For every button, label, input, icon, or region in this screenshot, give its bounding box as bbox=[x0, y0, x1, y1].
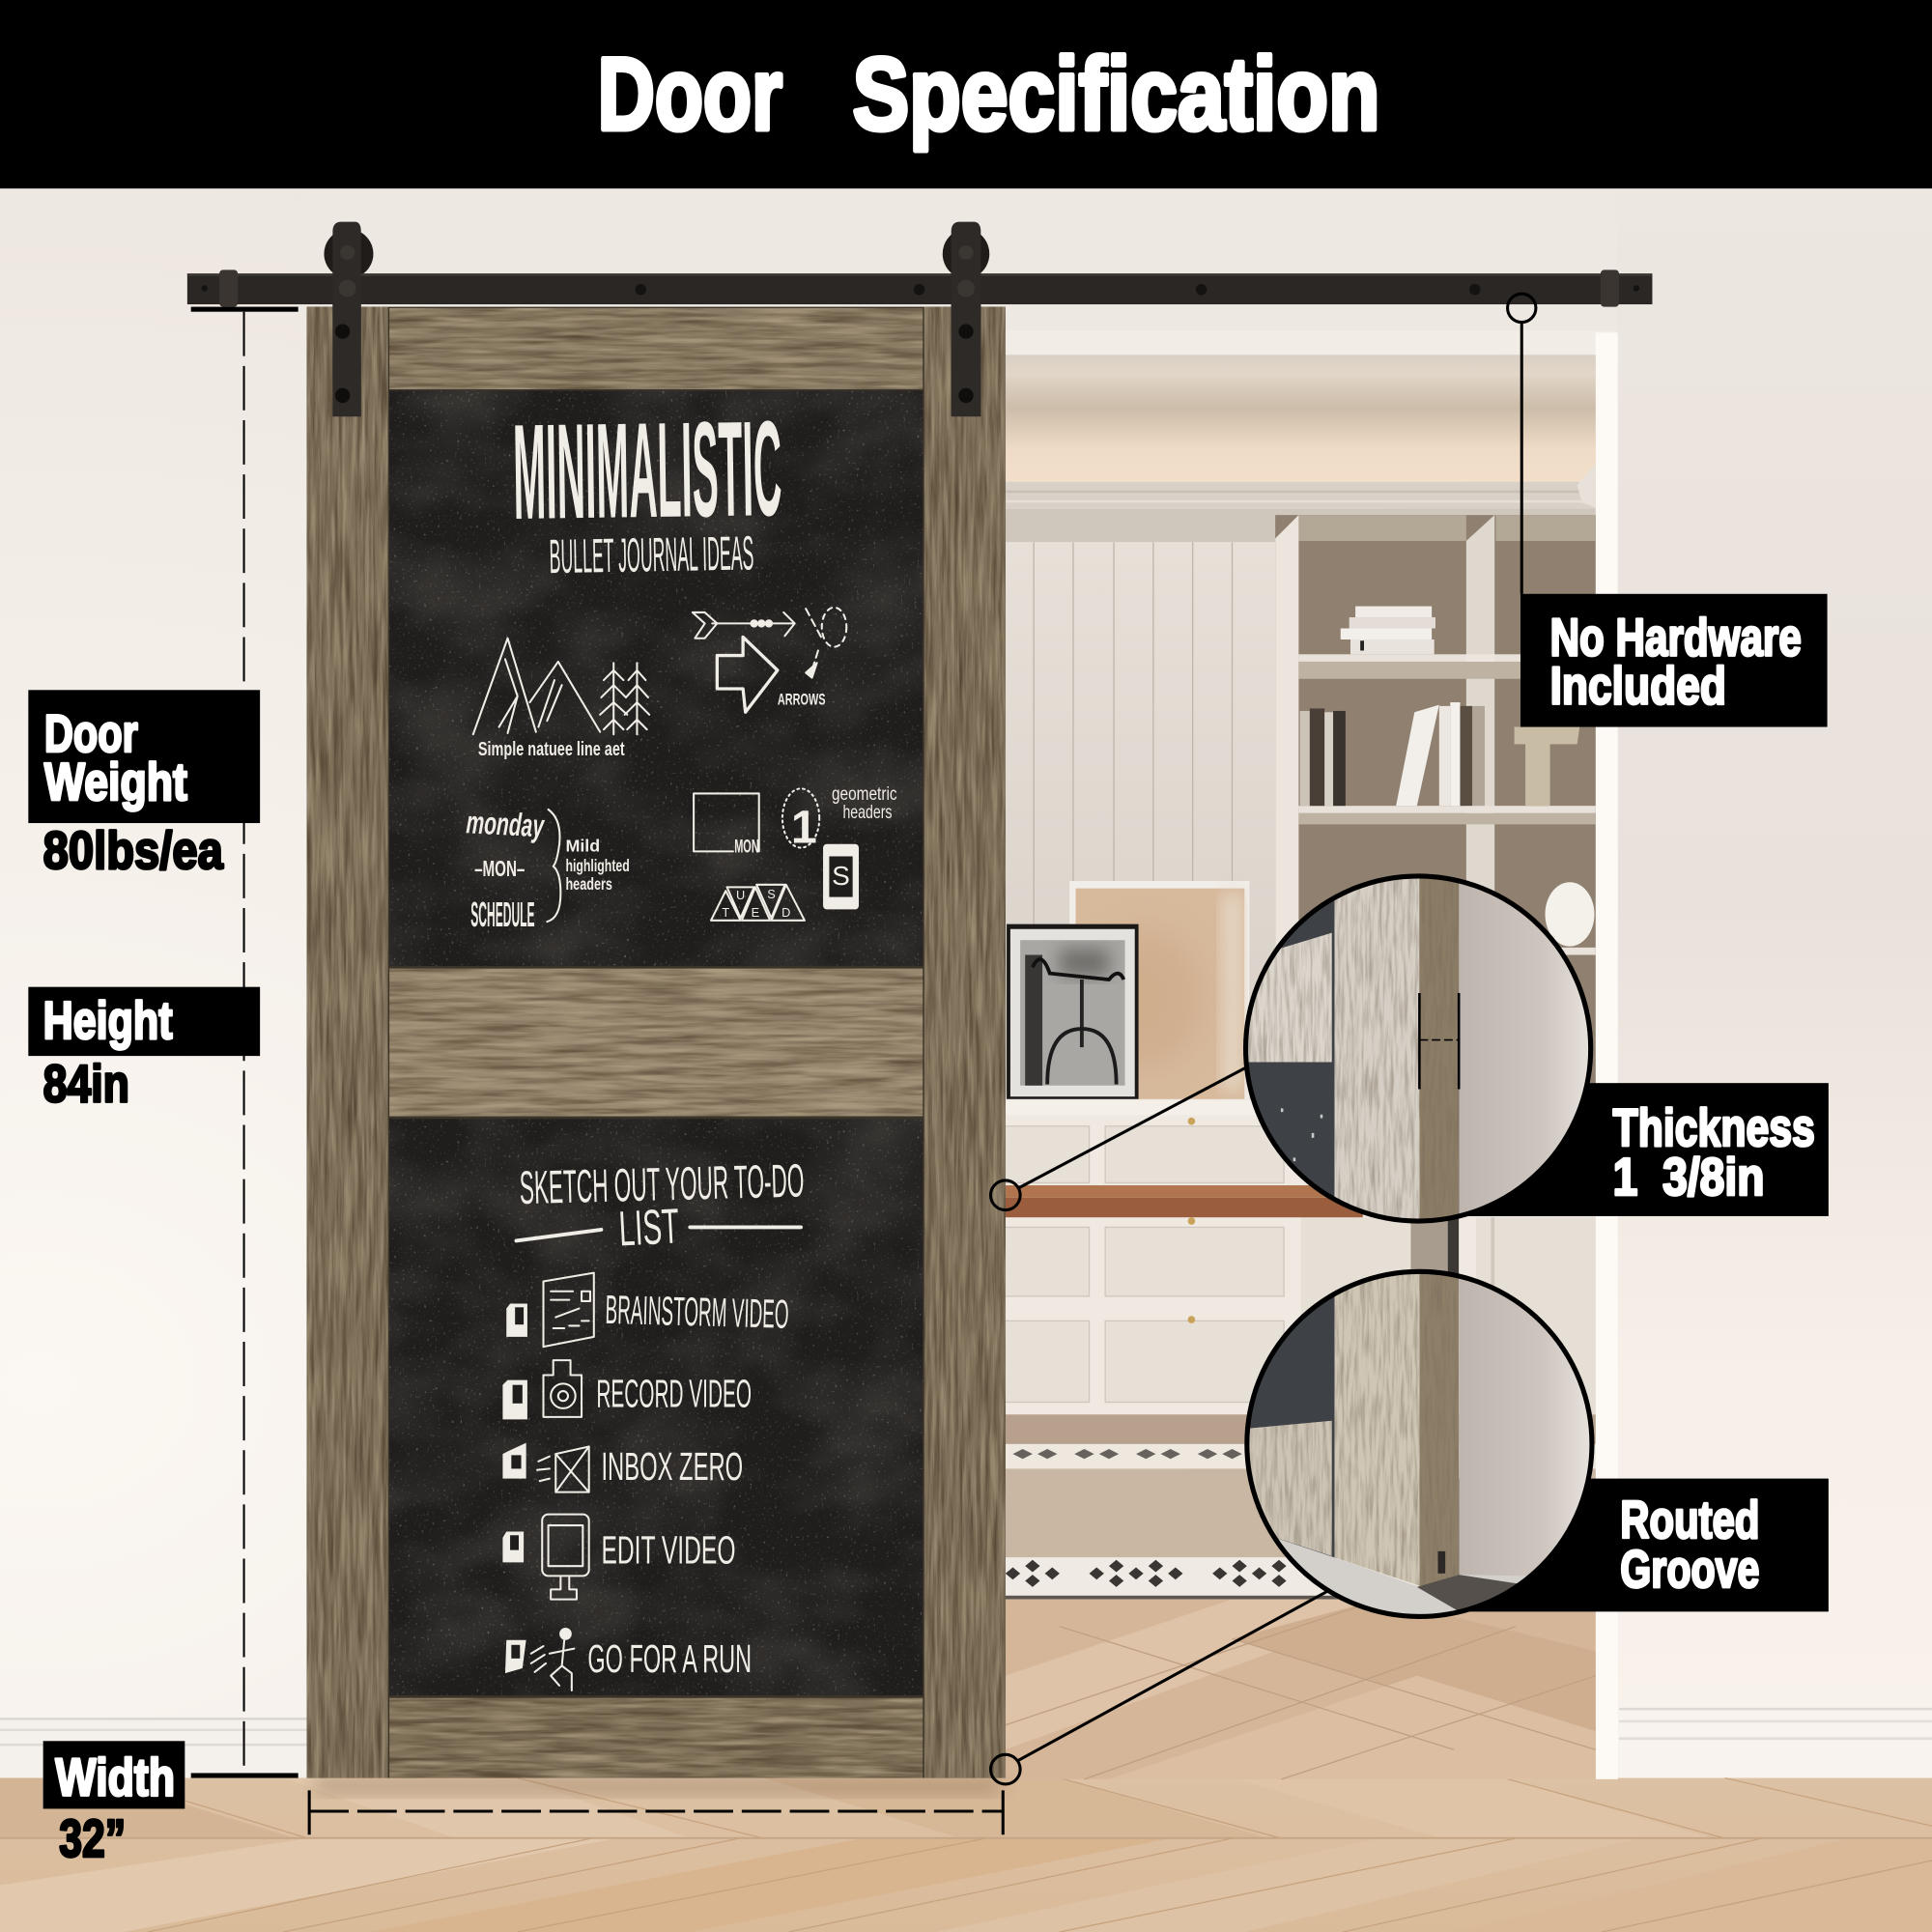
vase bbox=[1545, 882, 1596, 955]
chalkboard upper: SCHEDULE bbox=[470, 895, 535, 934]
list heading bbox=[516, 1198, 801, 1257]
right hanger bbox=[943, 222, 989, 416]
item: record: RECORD VIDEO bbox=[596, 1372, 752, 1416]
chalkboard upper: BULLET JOURNAL IDEAS bbox=[549, 526, 754, 583]
hanger straps over rail bbox=[332, 245, 980, 416]
middle rail bbox=[389, 969, 923, 1117]
rail bolts bbox=[202, 284, 1639, 295]
chalkboard lower: BRAINSTORM VIDEO bbox=[605, 1287, 789, 1337]
ring bbox=[1246, 876, 1591, 1221]
label: door weight bbox=[28, 690, 260, 823]
door backing bbox=[307, 307, 1006, 1778]
nature caption: Simple natuee line aet bbox=[478, 739, 625, 760]
geometric headers: MON bbox=[734, 838, 759, 858]
mild highlighted headers bbox=[565, 836, 630, 894]
label: width: Width bbox=[55, 1747, 175, 1806]
chalkboard lower bbox=[389, 1119, 923, 1695]
label: thickness: Thickness bbox=[1613, 1097, 1815, 1157]
chalkboard upper bbox=[389, 390, 923, 966]
height dimension bbox=[191, 307, 298, 1778]
callout marker: hardware bbox=[1508, 294, 1536, 594]
item: go for a run: GO FOR A RUN bbox=[587, 1636, 752, 1681]
label: routed groove: Groove bbox=[1620, 1539, 1759, 1599]
left hanger bbox=[324, 222, 373, 416]
label: door weight: Door bbox=[44, 703, 138, 763]
geometric headers: 1 bbox=[791, 801, 817, 853]
geometric headers: headers bbox=[842, 803, 892, 823]
right lower cabinet bbox=[1301, 1217, 1596, 1417]
groove notch bbox=[1438, 1551, 1445, 1574]
wooden counter bbox=[1006, 1185, 1363, 1217]
label: no hardware: No Hardware bbox=[1550, 608, 1802, 668]
barn door bbox=[307, 307, 1006, 1794]
left stile bbox=[307, 307, 388, 1778]
label: door weight: Weight bbox=[44, 752, 187, 811]
value: width: 32” bbox=[59, 1808, 126, 1868]
baseboards bbox=[0, 1708, 1932, 1778]
light rail bbox=[1248, 933, 1332, 1063]
cabinets bbox=[1003, 1099, 1301, 1414]
mild highlighted headers: Mild bbox=[565, 836, 600, 855]
edge bbox=[1419, 868, 1459, 1233]
mild highlighted headers: headers bbox=[565, 874, 612, 894]
stile face bbox=[1334, 868, 1419, 1233]
bookcase bbox=[1275, 515, 1596, 1119]
shelves bbox=[1298, 654, 1596, 824]
item: go for a run bbox=[505, 1628, 752, 1690]
mild highlighted headers: highlighted bbox=[565, 856, 630, 875]
crown molding bbox=[1006, 464, 1596, 542]
label: thickness bbox=[1458, 1083, 1829, 1216]
mon header: –MON– bbox=[474, 856, 526, 881]
thickness marks bbox=[1419, 993, 1459, 1090]
geometric headers: S bbox=[832, 861, 850, 891]
detail circle: routed groove bbox=[1238, 1263, 1597, 1627]
item: brainstorm bbox=[506, 1273, 789, 1347]
room floor and rug bbox=[1006, 1414, 1596, 1779]
width dimension bbox=[309, 1790, 1003, 1834]
chalkboard lower: SKETCH OUT YOUR TO-DO bbox=[519, 1154, 805, 1214]
item: record bbox=[502, 1360, 752, 1419]
specks on board bbox=[1282, 1109, 1322, 1161]
stacked books bbox=[1341, 607, 1435, 654]
adjacent wall bbox=[1459, 1263, 1597, 1577]
floor under door bbox=[1238, 1525, 1597, 1627]
board surface bbox=[389, 1119, 923, 1695]
tuesday banner: D bbox=[781, 905, 790, 920]
dark panel bbox=[1248, 900, 1335, 1196]
tuesday banner bbox=[711, 885, 805, 921]
rail stoppers bbox=[219, 270, 1619, 307]
dark panel bbox=[1250, 1296, 1337, 1559]
edge bbox=[1419, 1263, 1459, 1587]
callout leader: groove bbox=[991, 1589, 1331, 1784]
list heading: LIST bbox=[617, 1198, 681, 1257]
framed bicycle photo bbox=[1007, 924, 1139, 1100]
rug diamonds bbox=[1006, 1449, 1287, 1587]
arrows caption: ARROWS bbox=[778, 691, 826, 709]
adjacent wall bbox=[1459, 883, 1588, 1213]
arrow sketches bbox=[693, 608, 846, 712]
beadboard wall bbox=[1006, 542, 1282, 1122]
callout leader: thickness bbox=[991, 1067, 1247, 1210]
doorway casing bbox=[1006, 330, 1618, 1779]
detail circle: thickness bbox=[1238, 868, 1597, 1233]
item: edit video bbox=[502, 1515, 735, 1600]
bottom rail bbox=[389, 1698, 923, 1778]
board surface bbox=[389, 390, 923, 966]
label: routed groove: Routed bbox=[1620, 1490, 1759, 1549]
title: Door bbox=[598, 36, 782, 152]
tuesday banner: U bbox=[736, 888, 745, 902]
ceiling bbox=[1006, 355, 1596, 482]
brace bbox=[547, 810, 560, 922]
item: inbox zero: INBOX ZERO bbox=[601, 1444, 743, 1489]
tuesday banner: T bbox=[722, 905, 729, 920]
label: thickness: 1 3/8in bbox=[1613, 1147, 1765, 1207]
doorway interior scene bbox=[1003, 330, 1618, 1779]
lamp bbox=[1515, 727, 1579, 806]
right stile bbox=[924, 307, 1006, 1778]
title: Specification bbox=[853, 36, 1380, 152]
label: height bbox=[28, 987, 260, 1056]
label: no hardware bbox=[1520, 594, 1828, 727]
barn door track rail bbox=[187, 270, 1652, 307]
door shadow on floor bbox=[316, 1778, 1001, 1794]
label: height: Height bbox=[43, 990, 173, 1050]
light rail bbox=[1249, 1420, 1332, 1556]
item: edit video: EDIT VIDEO bbox=[601, 1528, 735, 1573]
geometric headers: geometric bbox=[832, 784, 897, 805]
title bbox=[598, 36, 1380, 152]
ring bbox=[1247, 1271, 1592, 1616]
value: height: 84in bbox=[43, 1053, 129, 1113]
value: door weight: 80lbs/ea bbox=[43, 820, 223, 880]
geometric headers bbox=[694, 784, 897, 909]
header bar bbox=[0, 0, 1932, 188]
header examples: monday bbox=[466, 805, 546, 844]
tuesday banner: E bbox=[752, 905, 759, 920]
floor bbox=[0, 1778, 1932, 1932]
stile face bbox=[1334, 1263, 1419, 1586]
barn door: MINIMALISTIC bbox=[512, 392, 782, 548]
upright books bbox=[1300, 702, 1485, 806]
top rail bbox=[389, 308, 923, 389]
tuesday banner: S bbox=[767, 887, 776, 901]
item: inbox zero bbox=[502, 1443, 743, 1492]
label: no hardware: Included bbox=[1550, 655, 1726, 715]
mountains sketch bbox=[473, 639, 649, 734]
leaning art bbox=[1069, 881, 1249, 1103]
label: routed groove bbox=[1458, 1479, 1829, 1611]
